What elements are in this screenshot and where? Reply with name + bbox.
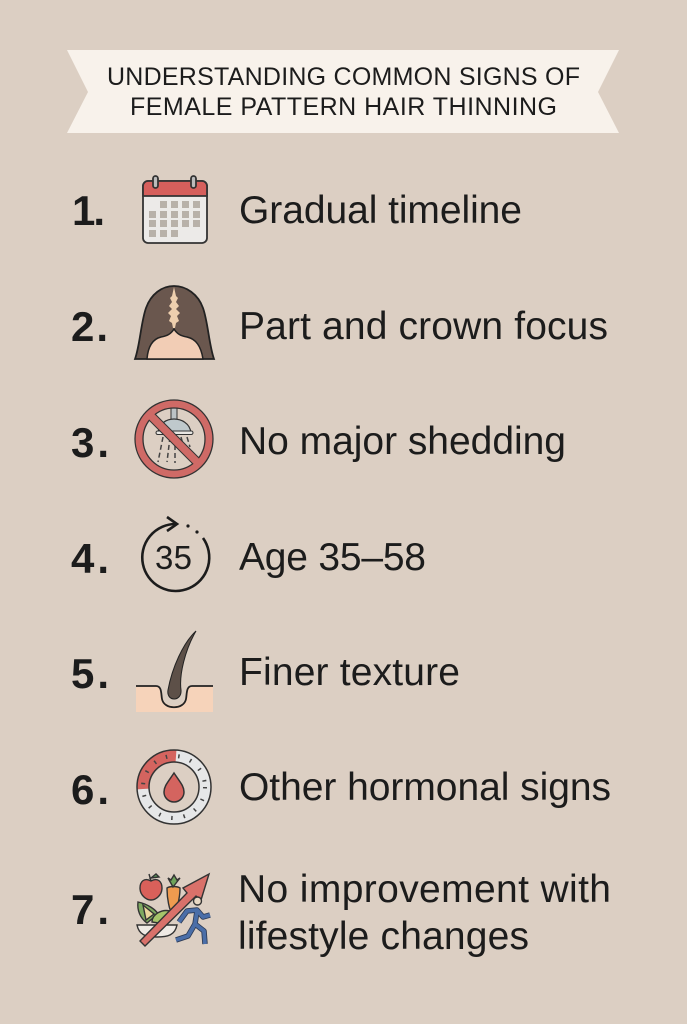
item 4: age 35-58: Age 35–58 [239, 536, 426, 579]
icon: age cycle: 35 [155, 539, 192, 576]
item 4: age 35-58: 4. [71, 535, 109, 582]
item 5: finer texture: 5. [71, 650, 109, 697]
item 3: no major shedding: 3. [71, 419, 109, 466]
icon: age cycle [142, 517, 209, 591]
icon: calendar [143, 176, 207, 243]
item 6: other hormonal signs: 6. [71, 766, 109, 813]
title [107, 63, 580, 121]
title banner [67, 50, 619, 133]
item 6: other hormonal signs [71, 750, 611, 824]
item 3: no major shedding [71, 400, 566, 478]
label: lifestyle changes [238, 915, 529, 958]
item 1: gradual timeline: 1. [72, 187, 105, 234]
item 7: no improvement with lifestyle changes: 7. [71, 886, 109, 933]
item 6: other hormonal signs: Other hormonal signs [239, 766, 611, 809]
icon: hair follicle [136, 631, 213, 712]
item 5: finer texture [71, 631, 460, 712]
label [238, 868, 611, 958]
item 2: part and crown focus [71, 286, 608, 359]
item 7: no improvement with lifestyle changes [71, 868, 611, 958]
icon: hair part [135, 286, 214, 359]
label: No improvement with [238, 868, 611, 911]
icon: no shower [135, 400, 213, 478]
item 2: part and crown focus: Part and crown focus [239, 305, 608, 348]
item 1: gradual timeline: Gradual timeline [239, 189, 522, 232]
icon: hormonal cycle [137, 750, 211, 824]
item 1: gradual timeline [72, 176, 522, 243]
item 3: no major shedding: No major shedding [239, 420, 566, 463]
title: FEMALE PATTERN HAIR THINNING [130, 93, 557, 121]
item 4: age 35-58 [71, 517, 426, 591]
title: UNDERSTANDING COMMON SIGNS OF [107, 63, 580, 91]
item 5: finer texture: Finer texture [239, 651, 460, 694]
item 2: part and crown focus: 2. [71, 303, 108, 350]
icon: food and exercise [137, 874, 210, 946]
